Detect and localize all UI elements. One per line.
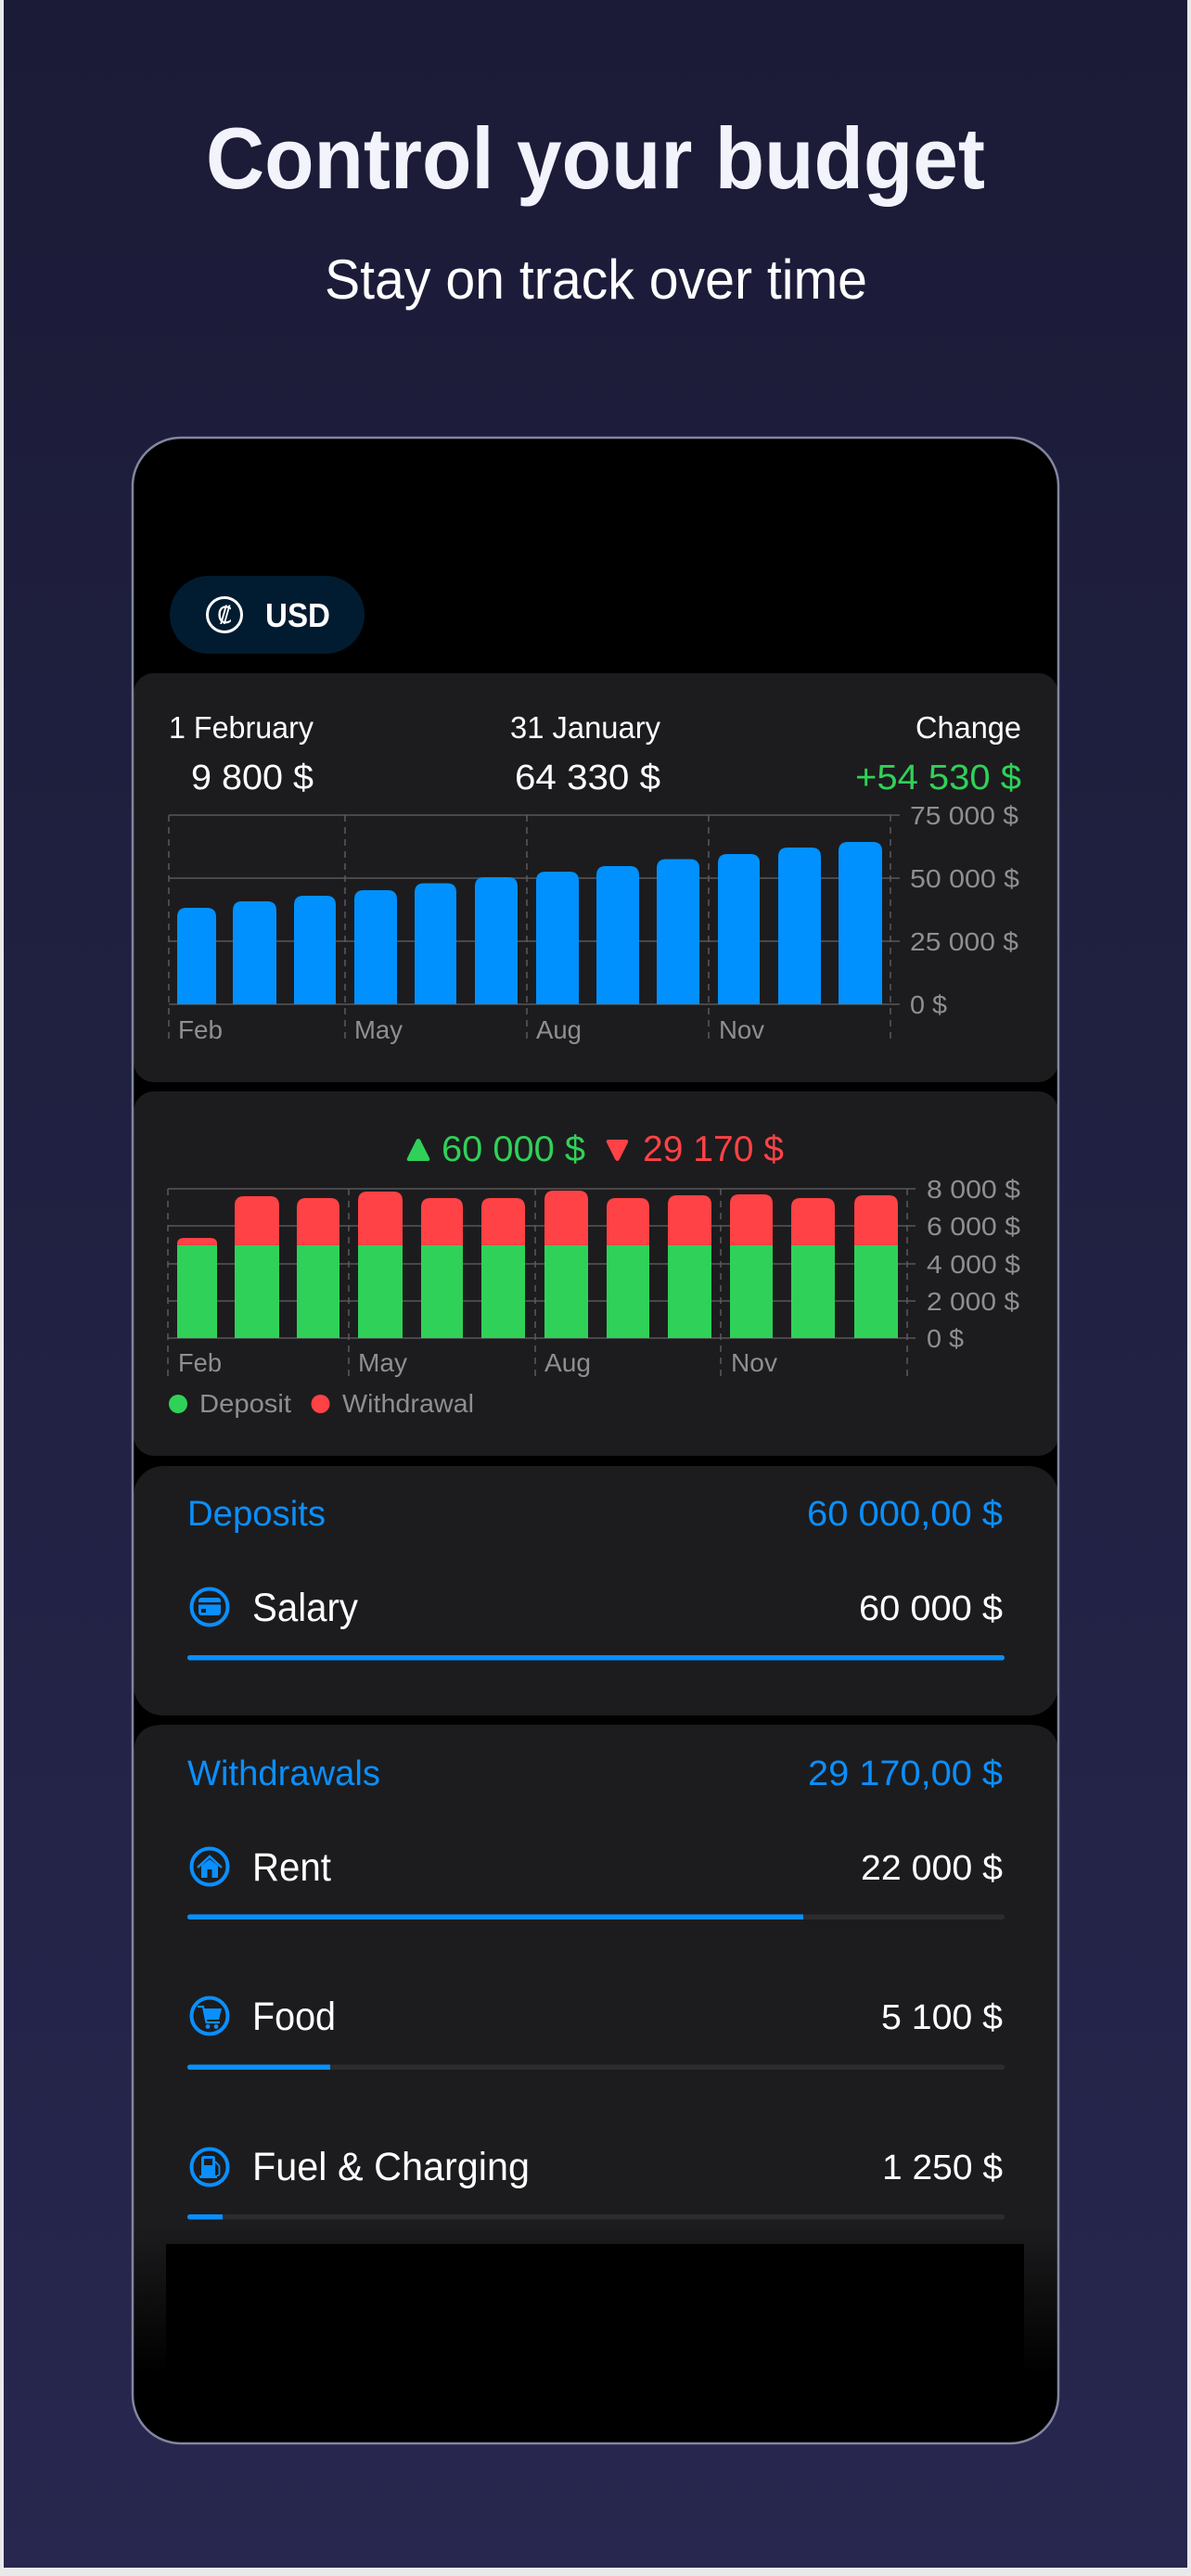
withdrawals header xyxy=(187,1758,1002,1790)
legend: Withdrawal xyxy=(342,1389,474,1418)
panel: deposits and withdrawals chart xyxy=(134,1091,1058,1456)
withdrawals header: 29 170,00 $ xyxy=(808,1754,1003,1793)
currency pill: ₡ xyxy=(217,602,232,629)
title: Control your budget xyxy=(206,109,985,207)
withdrawals header: Withdrawals xyxy=(187,1754,380,1793)
row: fuel and charging: Fuel & Charging xyxy=(252,2145,530,2189)
subtitle: Stay on track over time xyxy=(325,249,867,311)
deposits header: Deposits xyxy=(187,1495,326,1534)
y axis labels: 6 000 $ xyxy=(927,1212,1020,1241)
panel: balance chart xyxy=(134,673,1058,1082)
deposits header xyxy=(190,1498,1002,1533)
y axis labels: 0 $ xyxy=(910,990,947,1019)
icon: credit card xyxy=(191,1589,228,1625)
row: fuel and charging: 1 250 $ xyxy=(882,2149,1003,2187)
x axis labels: Aug xyxy=(536,1015,582,1044)
panel: deposits list xyxy=(134,1466,1058,1715)
row: rent: 22 000 $ xyxy=(861,1849,1003,1888)
x axis labels: May xyxy=(354,1015,403,1044)
y axis labels: 75 000 $ xyxy=(910,801,1018,830)
stacked bars: withdrawals xyxy=(177,1191,898,1245)
totals with arrows: 29 170 $ xyxy=(643,1129,784,1169)
y axis labels: 2 000 $ xyxy=(927,1287,1019,1316)
totals with arrows xyxy=(406,1134,783,1164)
summary: start, end and change: +54 530 $ xyxy=(855,759,1021,797)
summary: start, end and change: Change xyxy=(916,710,1021,745)
y axis labels: 25 000 $ xyxy=(910,927,1018,956)
x axis labels: Feb xyxy=(178,1015,223,1044)
row: salary: 60 000 $ xyxy=(859,1589,1003,1628)
bar chart: balance by month xyxy=(177,842,882,1004)
currency pill xyxy=(170,576,365,654)
panel: withdrawals list xyxy=(134,1725,1057,2335)
x axis labels: Aug xyxy=(544,1348,591,1377)
x axis labels: Feb xyxy=(178,1348,222,1377)
y axis labels: 4 000 $ xyxy=(927,1250,1020,1279)
x axis labels: Nov xyxy=(731,1348,777,1377)
row: salary xyxy=(187,1586,1005,1660)
summary: start, end and change: 64 330 $ xyxy=(515,759,660,797)
y axis labels: 50 000 $ xyxy=(910,864,1019,893)
icon: shopping cart xyxy=(191,1997,228,2034)
summary: start, end and change xyxy=(171,716,1020,792)
x axis labels: Nov xyxy=(719,1015,764,1044)
bottom black overlay xyxy=(166,2244,1024,2335)
summary: start, end and change: 31 January xyxy=(510,710,660,745)
row: fuel and charging xyxy=(187,2145,1005,2220)
y axis labels: 0 $ xyxy=(927,1324,964,1353)
currency pill: USD xyxy=(265,596,330,634)
row: rent xyxy=(187,1845,1005,1919)
icon: house xyxy=(191,1849,228,1884)
y axis labels: 8 000 $ xyxy=(927,1175,1020,1204)
phone card border xyxy=(133,438,1058,2443)
icon: fuel pump xyxy=(191,2149,228,2185)
row: salary: Salary xyxy=(252,1586,358,1630)
x axis labels xyxy=(180,1353,777,1377)
legend: Deposit xyxy=(199,1389,291,1418)
row: food: Food xyxy=(252,1995,336,2039)
row: rent: Rent xyxy=(252,1845,331,1890)
summary: start, end and change: 1 February xyxy=(169,710,314,745)
x axis labels xyxy=(180,1020,764,1044)
phone screen card xyxy=(133,438,1058,2448)
stacked bars: deposits xyxy=(177,1245,898,1338)
deposits header: 60 000,00 $ xyxy=(807,1495,1003,1534)
row: food xyxy=(187,1995,1005,2070)
summary: start, end and change: 9 800 $ xyxy=(191,759,314,797)
y axis labels xyxy=(927,1175,1020,1353)
legend xyxy=(169,1394,473,1418)
row: food: 5 100 $ xyxy=(881,1998,1003,2037)
x axis labels: May xyxy=(358,1348,407,1377)
totals with arrows: 60 000 $ xyxy=(442,1129,585,1169)
y axis labels xyxy=(910,801,1019,1019)
